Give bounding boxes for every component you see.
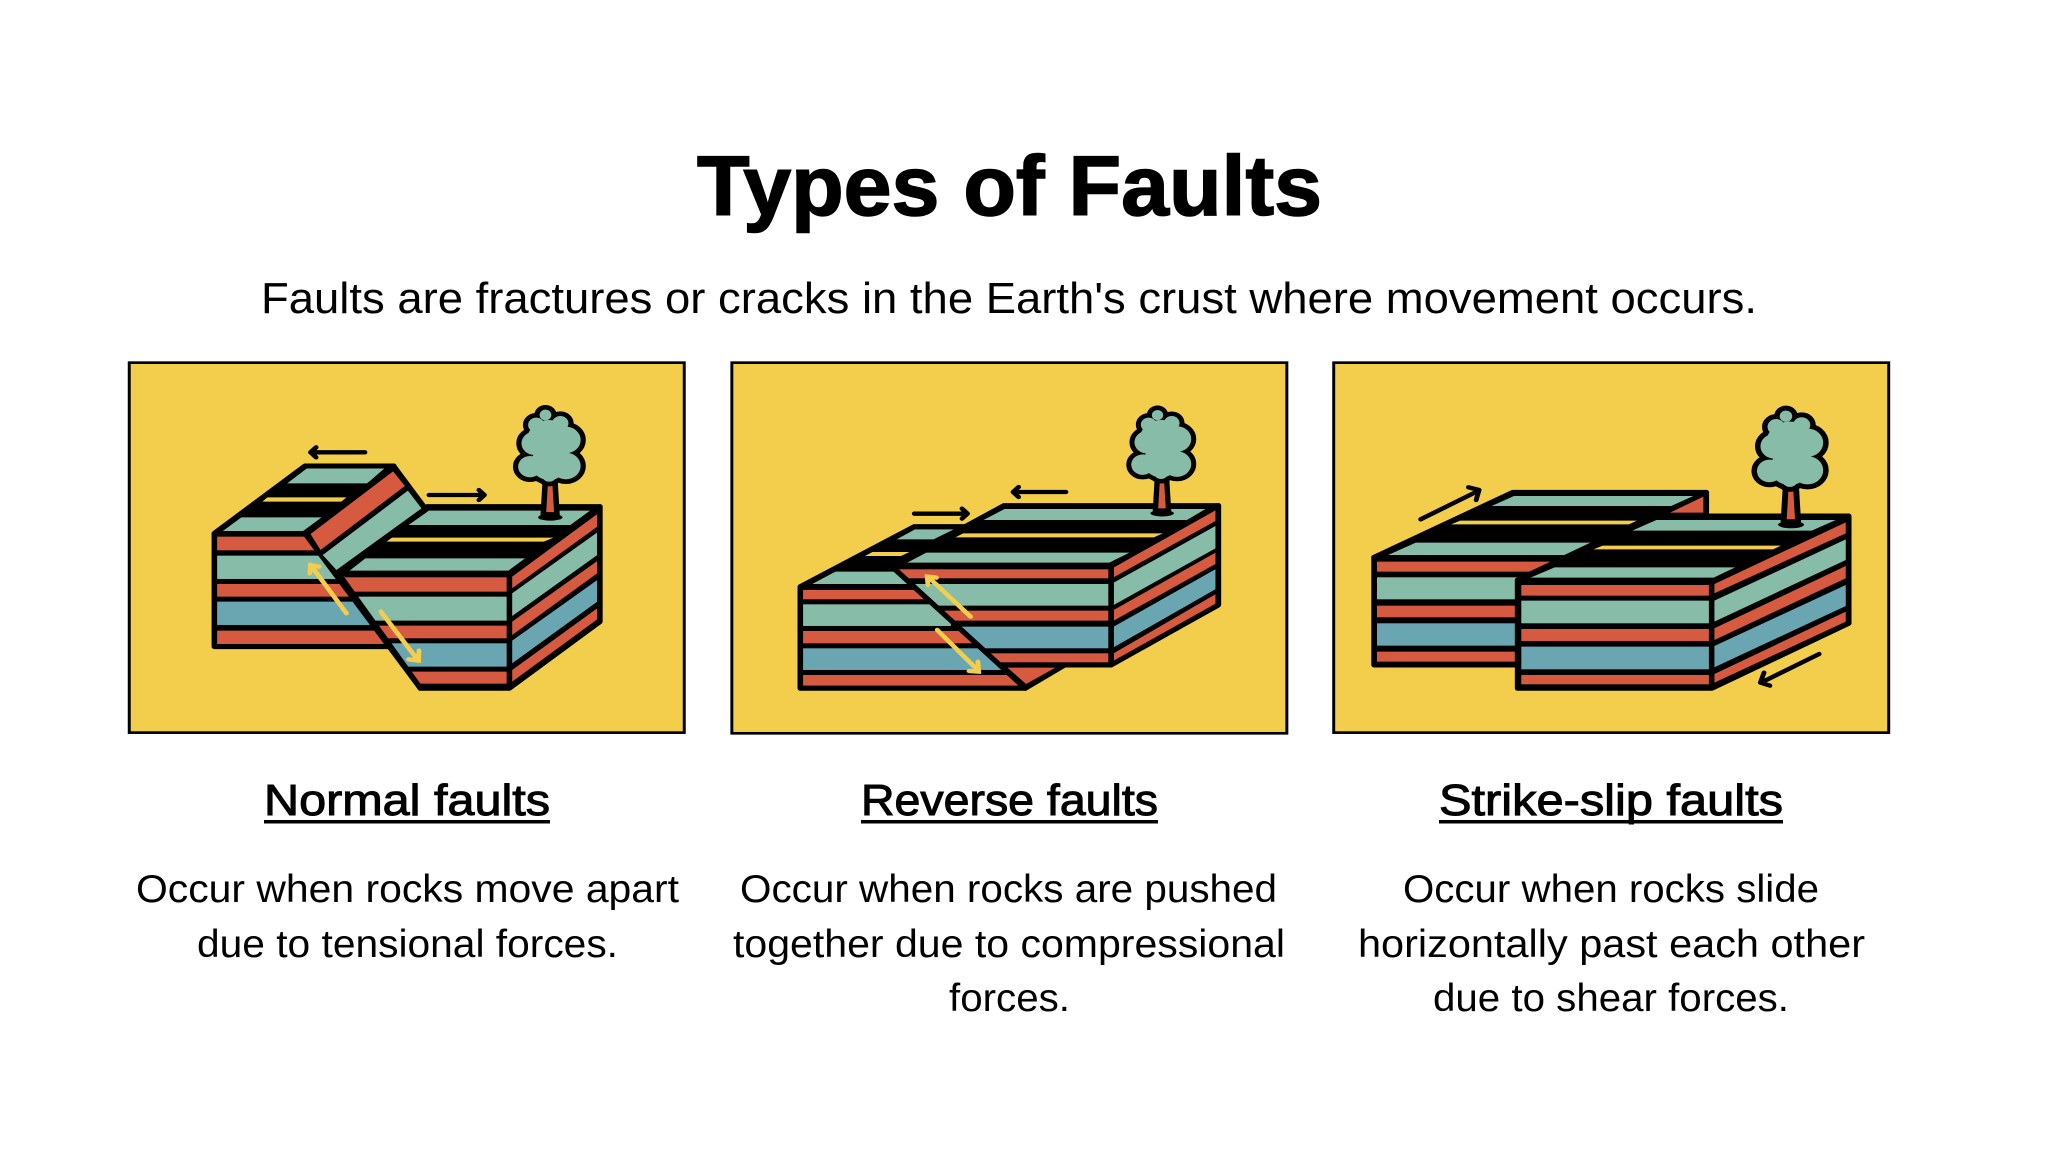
text: normal faults description: due to tensional forces. [197,923,618,966]
arrow: left movement [311,447,365,457]
heading: normal faults: Normal faults [264,776,550,825]
arrow: fault motion up [927,577,970,617]
text: strike-slip faults description: due to shear forces. [1433,977,1789,1020]
text: strike-slip faults description [1358,868,1865,1020]
icon: tree [518,410,581,521]
back block [1374,492,1706,665]
right block [893,506,1218,688]
left block [800,527,1025,688]
right block [305,507,600,688]
arrow: fault motion up [310,565,346,613]
panel: reverse faults illustration [732,363,1287,733]
heading: reverse faults: Reverse faults [861,776,1158,825]
front block [1518,516,1849,688]
text: strike-slip faults description: Occur when rocks slide [1403,868,1819,911]
text: reverse faults description [733,868,1285,1020]
subtitle: Faults are fractures or cracks in the Earth's crust where movement occurs. [261,274,1757,323]
arrow: fault motion down [381,612,419,661]
arrow: upper block movement [1421,487,1479,519]
heading: strike-slip faults: Strike-slip faults [1439,776,1783,825]
panel: normal faults illustration [129,363,684,733]
text: reverse faults description: forces. [949,977,1070,1020]
arrow: left movement [1013,487,1066,497]
text: normal faults description [136,868,679,966]
text: strike-slip faults description: horizontally past each other [1358,923,1865,966]
arrow: fault motion down [937,630,979,672]
icon: tree [1131,410,1191,516]
arrow: lower block movement [1760,654,1819,686]
panel: strike-slip faults illustration [1334,363,1889,733]
left block [214,466,420,688]
text: reverse faults description: together due to compressional [733,923,1285,966]
title: Types of Faults [697,139,1322,233]
text: normal faults description: Occur when rocks move apart [136,868,679,911]
fault plane [307,466,425,573]
arrow: right movement [429,490,484,500]
icon: tree [1757,411,1823,528]
arrow: right movement [914,509,968,519]
text: reverse faults description: Occur when rocks are pushed [740,868,1277,911]
